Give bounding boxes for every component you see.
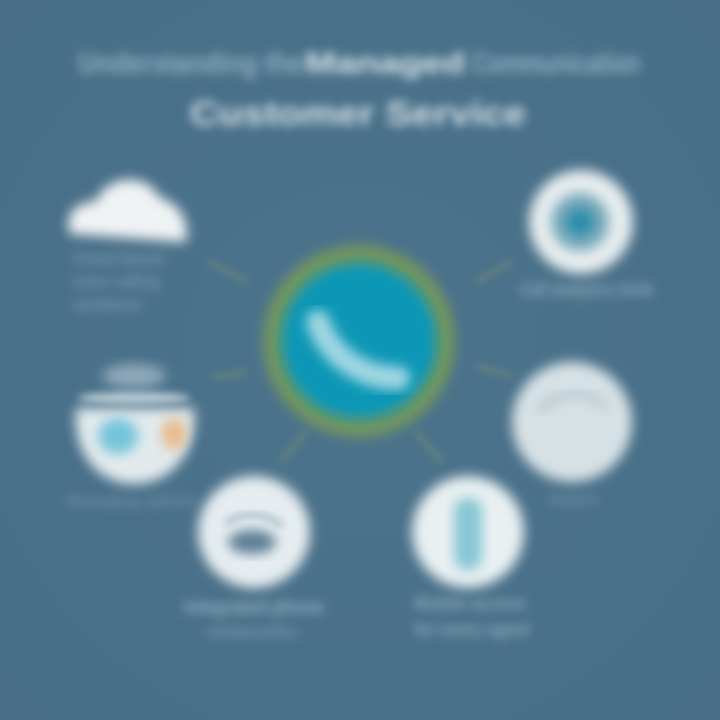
top right caption: Call analytics tools: [520, 279, 654, 301]
bowl orange swatch: [161, 418, 187, 450]
icon: dark oval: [228, 530, 276, 554]
bottom left caption: Integrated phone: [184, 596, 324, 619]
cloud icon panel: [68, 180, 187, 316]
bottom left caption: [184, 596, 324, 642]
title line 1: Understanding the: [78, 47, 303, 80]
right caption: Support: [548, 491, 598, 508]
icon: cloud: [68, 180, 187, 242]
icon: arc: [226, 515, 282, 526]
icon: white disc: [198, 476, 310, 588]
icon: teal centre: [551, 193, 609, 251]
left bowl icon panel: [66, 364, 196, 510]
icon: white disc: [412, 476, 524, 588]
teal inner disc: [281, 263, 437, 419]
left caption: Messaging options: [66, 493, 196, 510]
icon: inner arc: [540, 394, 606, 412]
title line 2: Customer Service: [190, 95, 526, 133]
cloud caption: [72, 248, 164, 316]
central icon: phone: [263, 245, 455, 437]
bottom right caption: [414, 593, 530, 641]
title line 1: [78, 47, 640, 80]
title line 1: Managed: [305, 47, 465, 80]
bottom left caption: networks: [206, 622, 298, 642]
icon: white disc: [529, 170, 633, 274]
bottom left icon panel: [184, 476, 324, 642]
phone handset: [318, 322, 398, 378]
icon: pale disc: [512, 362, 632, 482]
title line 1: Communication: [472, 47, 640, 80]
bottom right caption: for every agent: [414, 619, 530, 641]
cloud caption: Cloud based: [72, 248, 164, 270]
bottom right caption: Mobile access: [414, 593, 526, 615]
bowl band: [78, 392, 190, 404]
cloud caption: voice calling: [72, 271, 160, 293]
icon: bowl: [76, 408, 194, 484]
connectors: [208, 262, 512, 462]
outer green ring: [263, 245, 455, 437]
title: [78, 47, 640, 133]
top right icon panel: [520, 170, 654, 301]
cloud caption: systems: [72, 294, 142, 316]
bottom right icon panel: [412, 476, 530, 641]
bowl teal swatch: [98, 418, 138, 454]
icon: teal capsule: [454, 498, 482, 570]
small top label: [102, 364, 166, 388]
right icon panel: [512, 362, 632, 508]
